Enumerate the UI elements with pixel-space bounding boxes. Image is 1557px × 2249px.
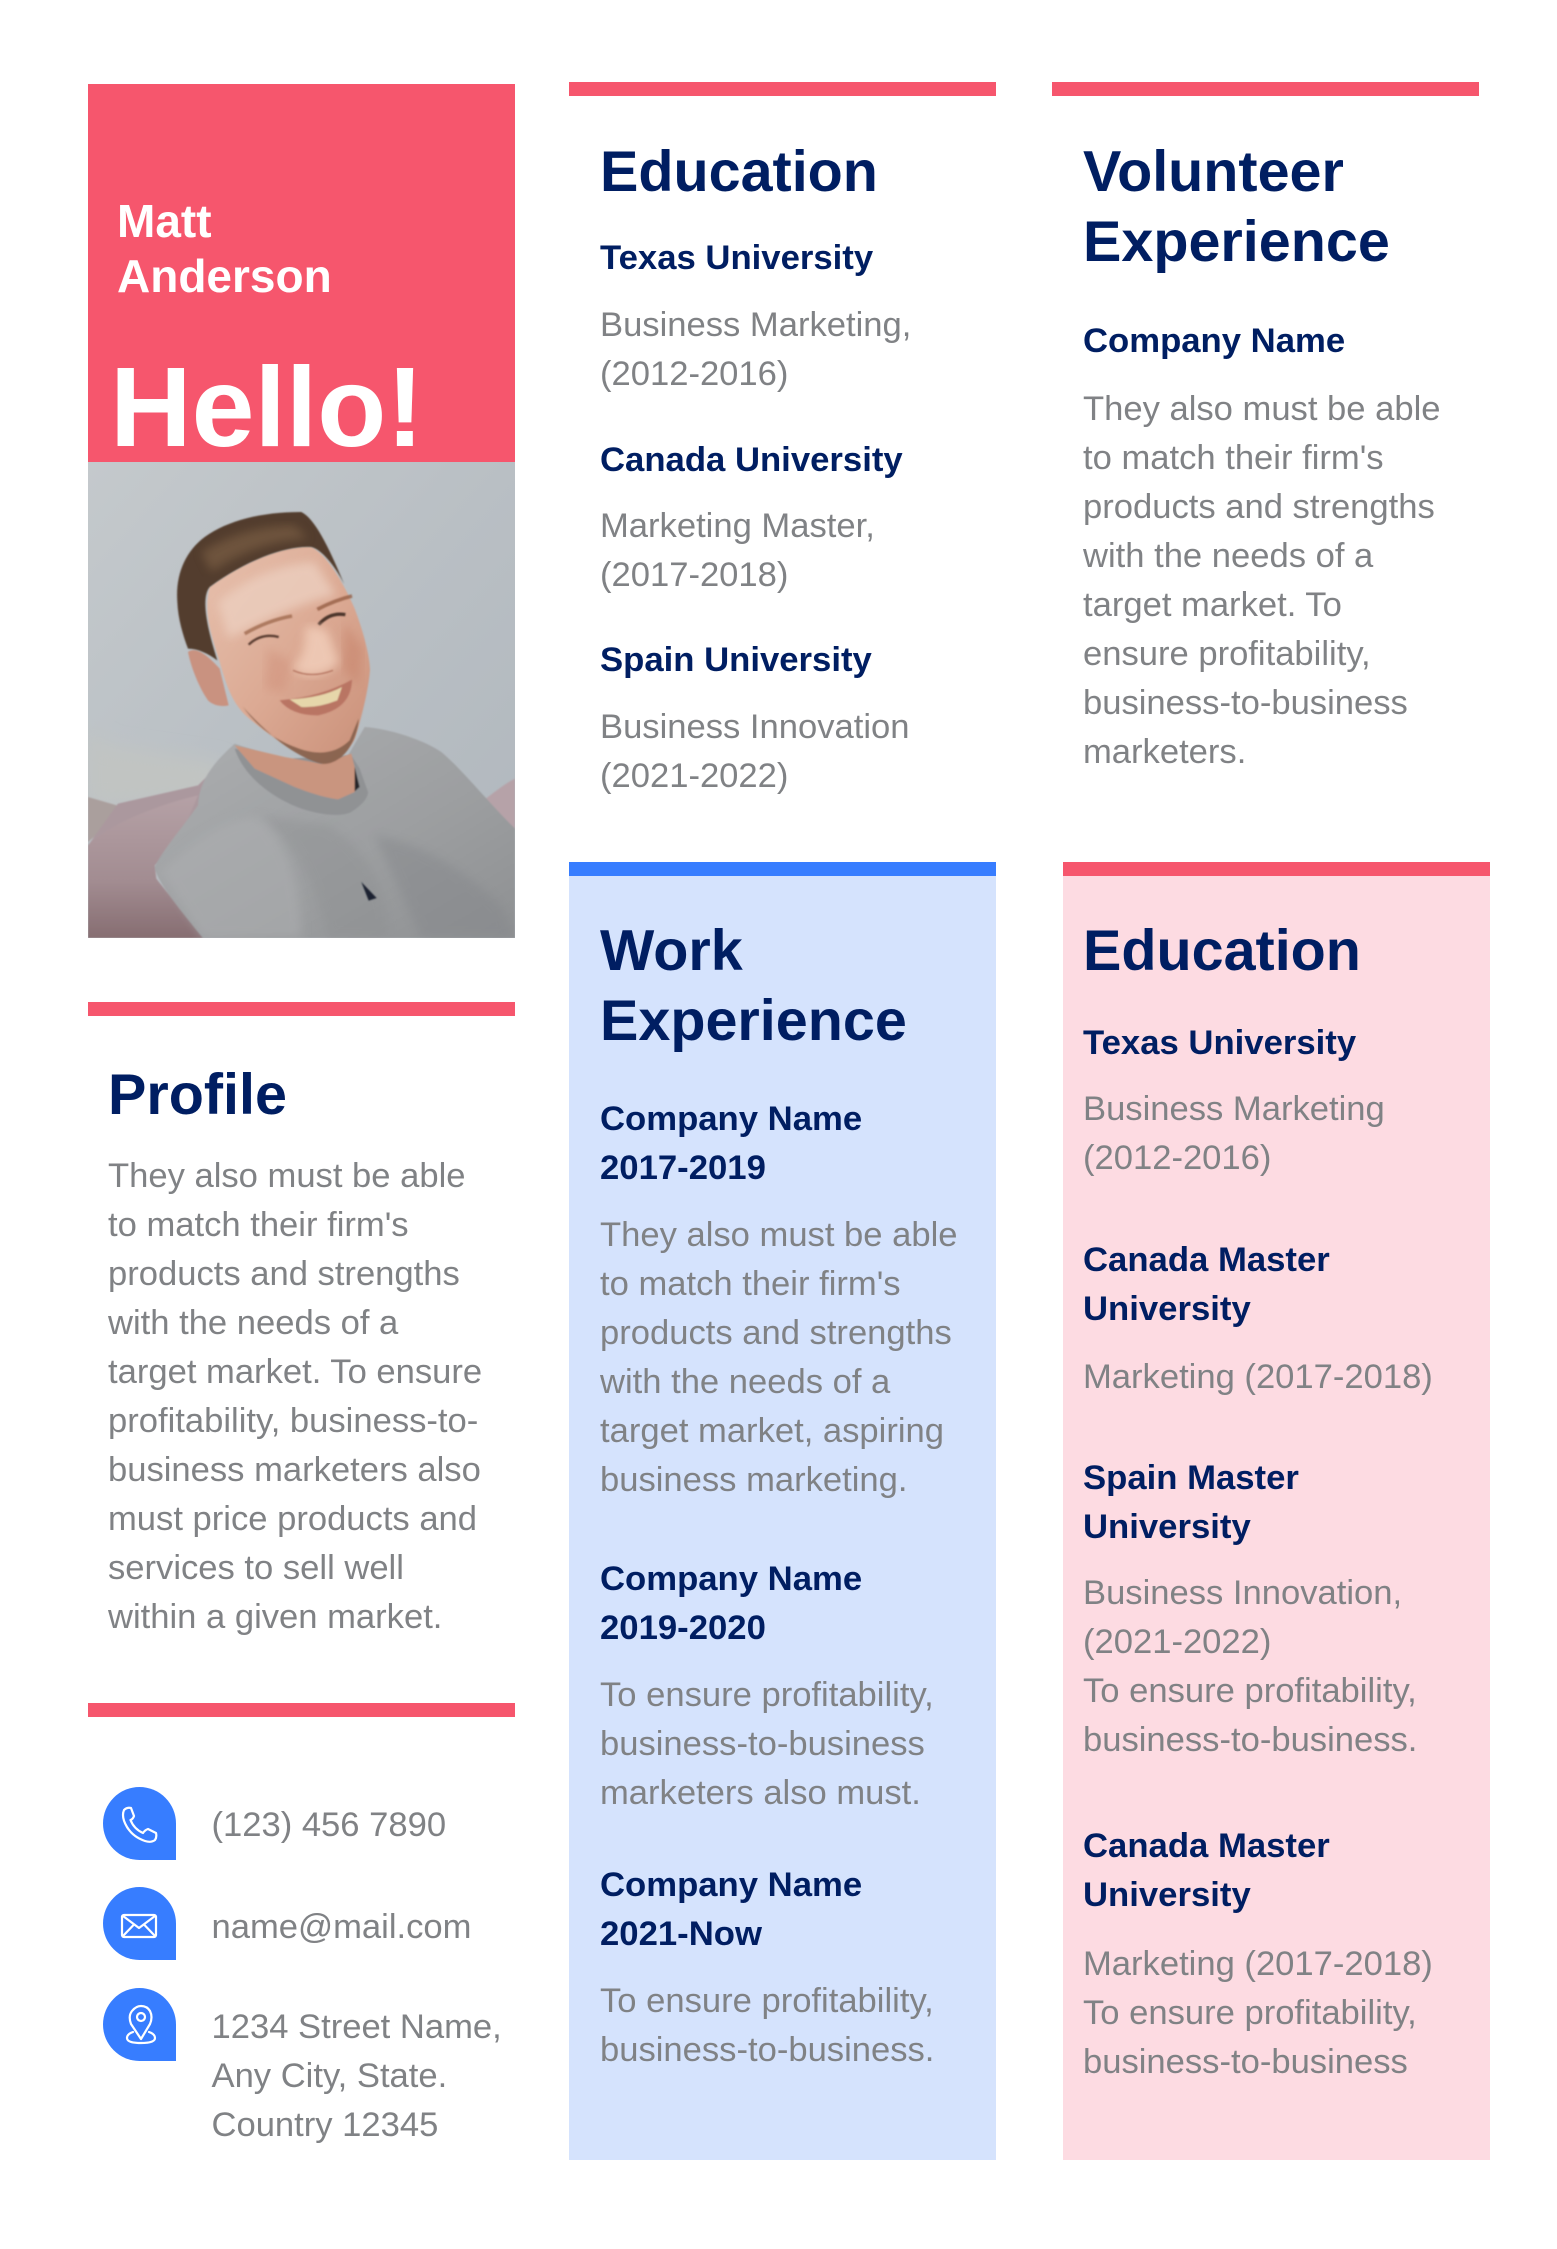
job 3 title: Company Name [600,1866,862,1904]
heading: volunteer experience: Experience [1083,210,1390,274]
job 3 title [600,1866,862,1952]
degree: Business Marketing: Business Marketing [1083,1090,1385,1128]
panel: work experience [569,862,996,2160]
volunteer text [1083,390,1440,770]
school: Texas University: Texas University [1083,1024,1356,1062]
heading: education: Education [600,140,878,204]
accent bar [88,1703,515,1717]
job 1 text: products and strengths [600,1314,952,1352]
school: Canada Master University second: Canada Master [1083,1826,1330,1864]
heading: profile: Profile [108,1062,287,1126]
degree: Business Innovation: Business Innovation [600,708,909,746]
accent bar [88,1002,515,1016]
panel: education top [569,82,996,795]
school: Spain Master University: University [1083,1508,1251,1546]
job 1 text [600,1216,958,1498]
school: Spain Master University [1083,1458,1299,1546]
school: Canada Master University second [1083,1826,1330,1914]
degree: Business Innovation [1083,1574,1417,1759]
name: Anderson [117,250,332,302]
accent bar [569,82,996,96]
heading: work experience: Work [600,919,743,983]
degree: Business Innovation: To ensure profitability, [1083,1672,1417,1710]
volunteer text: target market. To [1083,586,1342,624]
school: Canada Master University: Canada Master [1083,1240,1330,1278]
school: Canada University: Canada University [600,441,903,479]
job 1 text: They also must be able [600,1216,958,1254]
job 1 text: to match their firm's [600,1264,901,1302]
degree: Marketing Master [600,507,875,594]
job 2 title [600,1560,862,1647]
panel: name header [88,84,515,462]
degree: Business Innovation: business-to-business. [1083,1721,1417,1759]
degree: Business Marketing: Business Marketing, [600,306,911,344]
icon: phone [103,1787,176,1860]
volunteer text: business-to-business [1083,684,1408,722]
profile text: profitability, business-to- [108,1402,478,1440]
name [117,195,332,302]
volunteer text: with the needs of a [1083,536,1373,574]
degree: Business Innovation: Business Innovation, [1083,1574,1402,1612]
school: Canada Master University second: University [1083,1876,1251,1914]
profile text: target market. To ensure [108,1353,482,1391]
address [212,2008,502,2144]
profile text: within a given market. [108,1598,442,1636]
job 2 text: business-to-business [600,1724,925,1762]
degree: Marketing second [1083,1944,1433,2080]
heading: education: Education [1083,919,1361,983]
profile text: business marketers also [108,1451,481,1489]
volunteer text: products and strengths [1083,488,1435,526]
heading: work experience: Experience [600,989,907,1053]
volunteer text: marketers. [1083,732,1246,770]
panel: profile [88,1002,515,1636]
school: Spain University: Spain University [600,641,872,679]
job 3 text [600,1982,934,2068]
degree: Business Innovation [600,708,909,795]
profile text: They also must be able [108,1157,466,1195]
degree: Marketing second: Marketing (2017-2018) [1083,1944,1433,1982]
degree: Marketing second: business-to-business [1083,2042,1408,2080]
profile text: products and strengths [108,1255,460,1293]
icon: location pin [103,1988,176,2061]
job 1 title: 2017-2019 [600,1149,766,1187]
job 3 text: business-to-business. [600,2030,934,2068]
job 1 text: with the needs of a [600,1362,890,1400]
school: Spain Master University: Spain Master [1083,1458,1299,1496]
profile text: services to sell well [108,1549,404,1587]
address: 1234 Street Name, [212,2008,502,2046]
panel: contact [88,1703,515,2144]
heading: work experience [600,919,907,1053]
portrait photo [88,462,515,938]
school: Canada Master University: University [1083,1290,1251,1328]
job 2 text: To ensure profitability, [600,1676,934,1714]
degree: Business Marketing: (2012-2016) [1083,1138,1271,1176]
name: Matt [117,195,212,247]
job 2 title: 2019-2020 [600,1609,766,1647]
degree: Marketing Master: (2017-2018) [600,556,788,594]
job 2 text: marketers also must. [600,1774,921,1812]
profile text: must price products and [108,1500,477,1538]
job 3 text: To ensure profitability, [600,1982,934,2020]
volunteer text: to match their firm's [1083,438,1384,476]
degree: Business Marketing [1083,1090,1385,1176]
degree: Marketing Master: Marketing Master, [600,507,875,545]
accent bar [569,862,996,876]
job 1 text: business marketing. [600,1460,908,1498]
accent bar [1063,862,1490,876]
profile text [108,1157,482,1636]
address: Country 12345 [212,2106,438,2144]
email address: name@mail.com [212,1908,471,1946]
profile text: to match their firm's [108,1206,409,1244]
degree: Marketing second: To ensure profitability, [1083,1994,1417,2032]
panel: education bottom [1063,862,1490,2160]
degree: Business Marketing [600,306,911,393]
job 2 title: Company Name [600,1560,862,1598]
heading: volunteer experience [1083,140,1390,274]
heading: volunteer experience: Volunteer [1083,140,1344,204]
company name: Company Name [1083,322,1345,360]
volunteer text: ensure profitability, [1083,634,1371,672]
degree: Business Innovation: (2021-2022) [600,757,788,795]
school: Texas University: Texas University [600,239,873,277]
degree: Business Marketing: (2012-2016) [600,355,788,393]
icon: mail [103,1887,176,1960]
job 3 title: 2021-Now [600,1914,762,1952]
panel: volunteer experience [1052,82,1479,770]
job 1 title: Company Name [600,1100,862,1138]
phone number: (123) 456 7890 [212,1806,446,1844]
greeting: Hello! [110,344,424,470]
profile text: with the needs of a [108,1304,398,1342]
address: Any City, State. [212,2056,447,2094]
volunteer text: They also must be able [1083,390,1440,428]
degree: Business Innovation: (2021-2022) [1083,1623,1271,1661]
job 2 text [600,1676,934,1812]
accent bar [1052,82,1479,96]
job 1 text: target market, aspiring [600,1412,944,1450]
job 1 title [600,1100,862,1187]
school: Canada Master University [1083,1240,1330,1328]
degree: Marketing: Marketing (2017-2018) [1083,1358,1433,1396]
